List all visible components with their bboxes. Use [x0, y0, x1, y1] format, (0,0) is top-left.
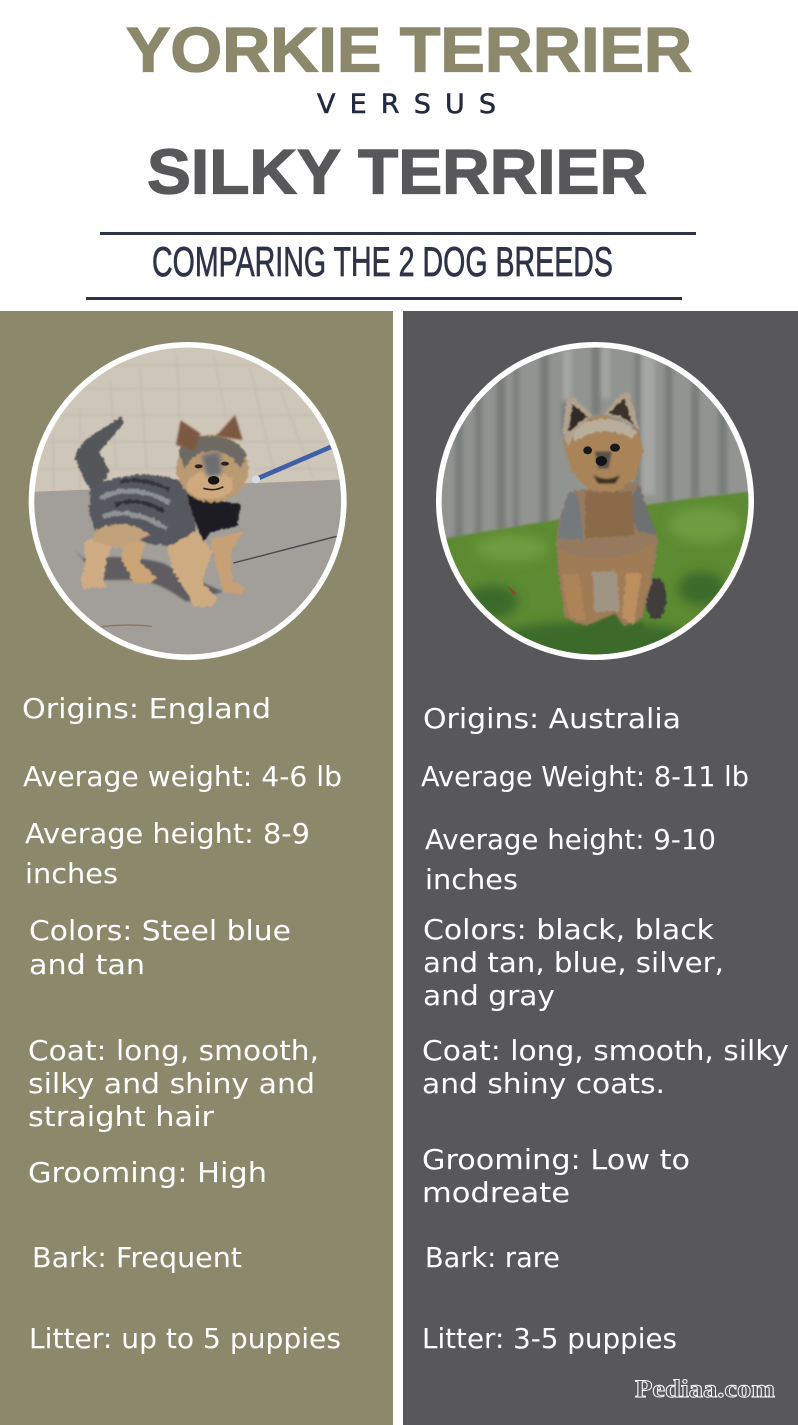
facts: Silky: Grooming: Low to	[422, 1144, 690, 1176]
facts: Yorkie: Bark: Frequent	[32, 1242, 242, 1274]
leash	[253, 447, 331, 480]
top rule	[100, 232, 696, 235]
facts: Yorkie: straight hair	[28, 1101, 215, 1133]
facts: Silky: and shiny coats.	[422, 1068, 665, 1100]
facts: Silky	[421, 703, 789, 1355]
facts: Yorkie: and tan	[29, 949, 145, 981]
panel: Silky Terrier	[403, 311, 798, 1425]
facts: Yorkie	[22, 693, 342, 1355]
facts: Silky: Origins: Australia	[423, 703, 681, 735]
facts: Silky: modreate	[422, 1177, 570, 1209]
facts: Yorkie: Coat: long, smooth,	[28, 1035, 319, 1067]
title: Yorkie Terrier: YORKIE TERRIER	[126, 16, 692, 86]
facts: Yorkie: Grooming: High	[28, 1157, 267, 1189]
facts: Silky: Average Weight: 8-11 lb	[421, 761, 749, 793]
title: Silky Terrier: SILKY TERRIER	[147, 138, 647, 208]
photo: Yorkie on pavement	[28, 342, 347, 660]
facts: Yorkie: Litter: up to 5 puppies	[29, 1323, 341, 1355]
logo: Pediaa.com: Pediaa.com	[635, 1376, 775, 1403]
facts: Silky: and gray	[423, 980, 555, 1012]
facts: Yorkie: Origins: England	[22, 693, 271, 725]
facts: Silky: inches	[425, 864, 518, 896]
facts: Silky: Bark: rare	[425, 1242, 560, 1274]
facts: Yorkie: Average weight: 4-6 lb	[23, 761, 342, 793]
facts: Silky: Coat: long, smooth, silky	[422, 1035, 789, 1067]
facts: Yorkie: Average height: 8-9	[25, 818, 310, 850]
facts: Yorkie: inches	[25, 858, 118, 890]
facts: Silky: and tan, blue, silver,	[423, 947, 724, 979]
facts: Yorkie: Colors: Steel blue	[29, 915, 291, 947]
facts: Silky: Litter: 3-5 puppies	[422, 1323, 677, 1355]
subtitle: versus: VERSUS	[317, 89, 496, 120]
photo: Silky on grass	[436, 342, 754, 660]
panel: Yorkie Terrier	[0, 311, 393, 1425]
facts: Silky: Colors: black, black	[423, 914, 714, 946]
dog	[75, 417, 249, 607]
dog	[556, 392, 666, 625]
facts: Silky: Average height: 9-10	[425, 824, 716, 856]
bottom rule	[86, 297, 682, 300]
facts: Yorkie: silky and shiny and	[28, 1068, 315, 1100]
